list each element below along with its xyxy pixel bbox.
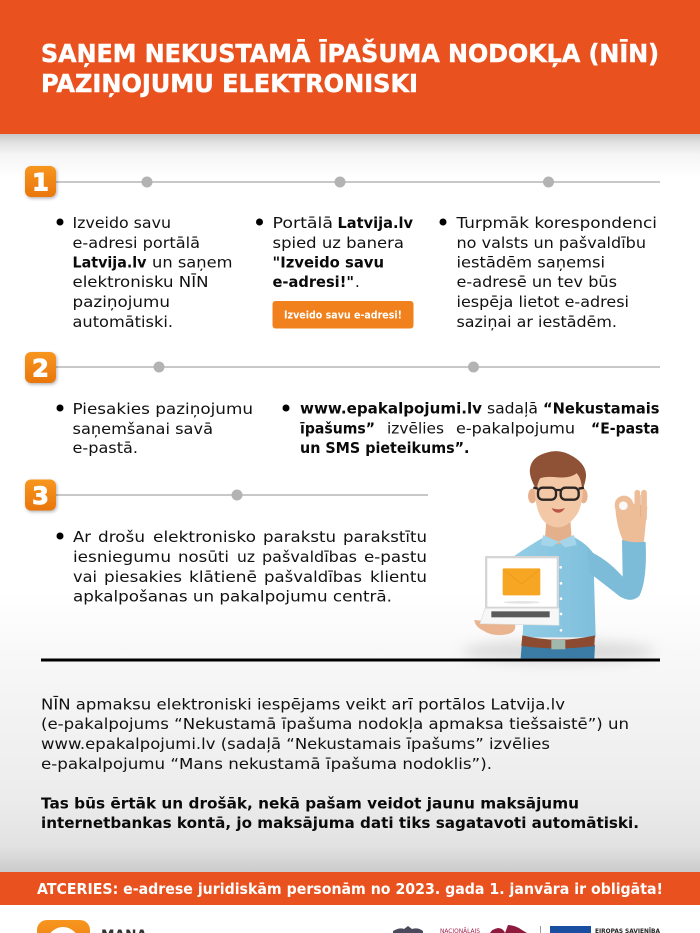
logo: crest: [393, 926, 423, 933]
logo: Nacionālais: [440, 925, 527, 933]
title: PAZIŅOJUMU ELEKTRONISKI: [41, 69, 418, 98]
step 3 text: drošu: [98, 528, 145, 546]
step 1 text: column 2: e-adresi!": [272, 273, 354, 291]
step 2 text: right: izvēlies: [387, 420, 444, 438]
step 1 text: column 2: Portālā: [272, 214, 333, 232]
raised hand: [615, 493, 647, 542]
step 1 badge: [25, 166, 56, 197]
step 1 text: column 3: Turpmāk korespondenci: [455, 214, 657, 232]
reminder banner: [0, 872, 700, 905]
shirt buttons: [559, 566, 562, 632]
paragraph: payment info: e-pakalpojumu “Mans nekustamā īpašuma nodoklis”).: [41, 755, 492, 773]
ears: [528, 489, 537, 503]
step 2 text: right: www.epakalpojumi.lv: [300, 400, 482, 418]
step 2 text: right: [282, 400, 660, 457]
step 3 text: uz: [237, 548, 255, 566]
step 2 text: right: e-pakalpojumu: [456, 420, 575, 438]
step 1 text: column 3: iestādēm saņemsi: [456, 254, 605, 272]
header band: [0, 0, 700, 134]
paragraph: payment info: NĪN apmaksu elektroniski iespējams veikt arī portālos Latvija.lv: [41, 696, 565, 714]
page background: [0, 134, 700, 872]
step 1 text: column 1: Latvija.lv: [72, 254, 147, 272]
step 3 text: vai: [73, 568, 97, 586]
step 2 text: right: sadaļā: [487, 400, 538, 418]
footer: [0, 905, 700, 933]
step 1 text: column 1: Izveido savu: [72, 214, 171, 232]
step 1 timeline: [25, 166, 660, 197]
hair: [530, 451, 586, 490]
step 1 badge: 1: [32, 168, 49, 196]
logo: Mana: [37, 920, 147, 933]
paragraph: payment info: (e-pakalpojums “Nekustamā īpašuma nodokļa apmaksa tiešsaistē”) un: [41, 715, 629, 733]
paragraph: bold conclusion: Tas būs ērtāk un drošāk, nekā pašam veidot jaunu maksājumu: [41, 794, 579, 812]
step 1 text: column 1: [56, 214, 232, 331]
mouth: [552, 508, 565, 513]
button: Izveido savu e-adresi: Izveido savu e-adresi!: [284, 310, 402, 322]
step 3 text: parakstītu: [343, 528, 427, 546]
divider: [41, 658, 660, 662]
jeans: [521, 645, 595, 658]
step 3 text: iesniegumu: [73, 548, 171, 566]
step 2 text: left: Piesakies paziņojumu: [72, 400, 253, 418]
step 3 text: piesakies: [104, 568, 182, 586]
shirt torso: [513, 536, 596, 637]
divider line: [540, 926, 541, 933]
step 3 text: [56, 528, 427, 606]
step 1 text: column 2: spied uz banera: [272, 234, 404, 252]
step 1 text: column 3: iespēja lietot e-adresi: [456, 293, 629, 311]
step 3 text: elektronisko: [153, 528, 256, 546]
paragraph: bold conclusion: internetbankas kontā, jo maksājuma dati tiks sagatavoti automātiski.: [41, 814, 639, 832]
collar: [541, 535, 577, 547]
step 2 badge: 2: [32, 354, 49, 382]
step 2 timeline: [25, 352, 660, 383]
belt: [521, 635, 595, 648]
step 2 text: right: īpašums”: [300, 420, 375, 438]
step 1 text: column 1: automātiski.: [72, 313, 173, 331]
step 2 text: left: [56, 400, 253, 457]
title: SAŅEM NEKUSTAMĀ ĪPAŠUMA NODOKĻA (NĪN): [41, 38, 659, 68]
step 1 text: column 3: no valsts un pašvaldību: [456, 234, 646, 252]
step 2 text: left: e-pastā.: [72, 439, 138, 457]
step 3 text: pašvaldības: [262, 548, 357, 566]
step 3 text: klientu: [370, 568, 427, 586]
step 3 text: parakstu: [263, 528, 336, 546]
step 2 badge: [25, 352, 56, 383]
button: Izveido savu e-adresi: [272, 301, 414, 328]
step 1 text: column 1: e-adresi portālā: [72, 234, 200, 252]
step 3 text: apkalpošanas un pakalpojumu centrā.: [73, 588, 392, 606]
step 1 text: column 2: [256, 214, 413, 291]
email icon: [503, 568, 540, 595]
step 1 text: column 2: Latvija.lv: [338, 214, 413, 232]
step 3 badge: 3: [32, 482, 49, 510]
illustration: man with laptop: [462, 451, 655, 663]
step 2 text: right: un SMS pieteikums”.: [300, 439, 470, 457]
glasses: [533, 488, 584, 500]
step 3 text: klātienē: [189, 568, 257, 586]
face: [535, 470, 583, 527]
step 3 timeline: [25, 480, 428, 510]
step 1 text: column 2: .: [355, 273, 360, 291]
step 1 text: column 2: "Izveido savu: [272, 254, 384, 272]
step 1 text: column 1: un saņem: [152, 254, 232, 272]
title: [41, 38, 659, 98]
paragraph: bold conclusion: [41, 794, 639, 832]
belt buckle: [551, 640, 565, 649]
step 2 text: left: saņemšanai savā: [72, 420, 213, 438]
logo: EU: [550, 926, 660, 933]
step 3 text: pašvaldības: [264, 568, 362, 586]
step 3 text: e-pastu: [364, 548, 427, 566]
laptop: [480, 556, 559, 625]
step 1 text: column 3: e-adresē un tev būs: [456, 273, 617, 291]
neck: [545, 515, 572, 544]
step 3 badge: [25, 480, 56, 510]
step 3 text: Ar: [73, 528, 92, 546]
step 1 text: column 1: elektronisku NĪN: [72, 273, 208, 291]
paragraph: payment info: www.epakalpojumi.lv (sadaļā “Nekustamais īpašums” izvēlies: [41, 735, 550, 753]
step 3 text: nosūti: [178, 548, 229, 566]
step 2 text: right: “E-pasta: [591, 420, 660, 438]
paragraph: payment info: [41, 696, 629, 773]
step 1 text: column 3: [440, 214, 657, 331]
holding hand: [474, 620, 515, 635]
step 1 text: column 1: paziņojumu: [72, 293, 170, 311]
step 1 text: column 3: saziņai ar iestādēm.: [456, 313, 617, 331]
step 2 text: right: “Nekustamais: [543, 400, 660, 418]
raised arm: [587, 540, 646, 600]
reminder banner: ATCERIES: e-adrese juridiskām personām no 2023. gada 1. janvāra ir obligāta!: [37, 880, 663, 898]
